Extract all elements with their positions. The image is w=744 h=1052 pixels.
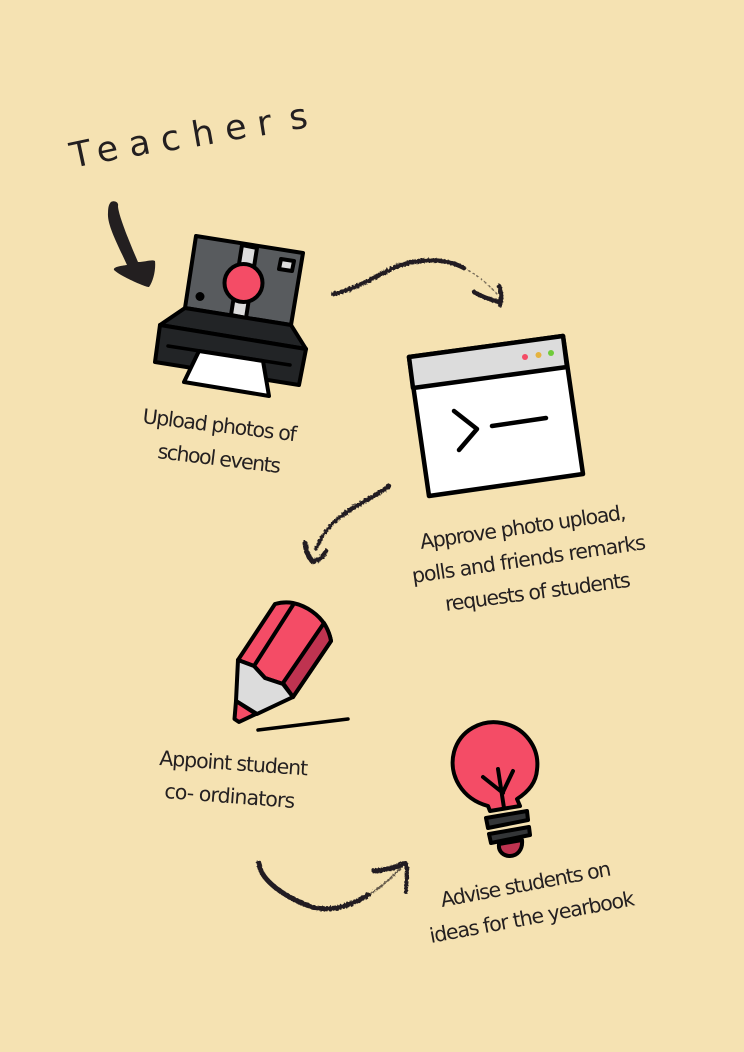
text: Appoint student co-ordinators: Appoint student <box>159 746 309 780</box>
pencil tip <box>234 701 256 722</box>
text: Advise students on ideas for the yearbook <box>428 857 637 948</box>
arrow: pencil to bulb <box>259 863 407 909</box>
bulb band bottom <box>489 827 530 843</box>
text: Advise students on ideas for the yearbook: ideas for the yearbook <box>428 886 637 948</box>
camera body <box>185 236 303 325</box>
pencil wood <box>236 660 293 714</box>
window dots <box>522 350 554 360</box>
camera strap <box>231 245 257 318</box>
bulb glass <box>453 722 537 811</box>
window header <box>409 336 567 388</box>
text: Upload photos of school events: Upload photos of <box>141 404 299 446</box>
terminal line <box>492 418 546 426</box>
camera base top <box>160 308 306 349</box>
text: Appoint student co-ordinators <box>159 746 309 813</box>
camera dot <box>196 292 204 301</box>
arrow: window to pencil <box>305 486 389 562</box>
title: Teachers: Teachers <box>66 97 310 177</box>
icon: pencil <box>234 602 348 730</box>
pencil ridge <box>254 605 293 666</box>
window frame <box>409 336 583 496</box>
pencil shaded side <box>283 623 331 697</box>
camera slot <box>168 346 290 365</box>
text: Approve photo upload <box>410 500 647 616</box>
text: Appoint student co-ordinators: co- ordinators <box>164 779 296 813</box>
bulb band top <box>486 811 528 828</box>
camera viewfinder <box>279 259 294 271</box>
text: Approve photo upload: requests of students <box>444 568 632 616</box>
text: Upload photos of school events: school events <box>156 439 282 478</box>
bulb filament <box>483 769 513 808</box>
text: Advise students on ideas for the yearbook: Advise students on <box>439 857 613 912</box>
text: Upload photos of school events <box>141 404 299 478</box>
terminal prompt <box>454 411 477 450</box>
arrow: camera to window <box>333 260 501 305</box>
icon: browser window <box>409 336 583 496</box>
bulb cap <box>499 840 522 856</box>
camera base <box>155 325 306 385</box>
camera photo <box>184 351 269 396</box>
text: Approve photo upload: polls and friends remarks <box>410 530 647 588</box>
drawn line <box>258 719 348 730</box>
arrow: brush arrow to camera <box>108 201 155 287</box>
camera lens <box>224 264 262 302</box>
icon: light bulb <box>453 722 537 856</box>
pencil body <box>238 602 331 697</box>
icon: instant camera <box>155 236 306 396</box>
text: Approve photo upload: Approve photo upload, <box>418 500 628 554</box>
